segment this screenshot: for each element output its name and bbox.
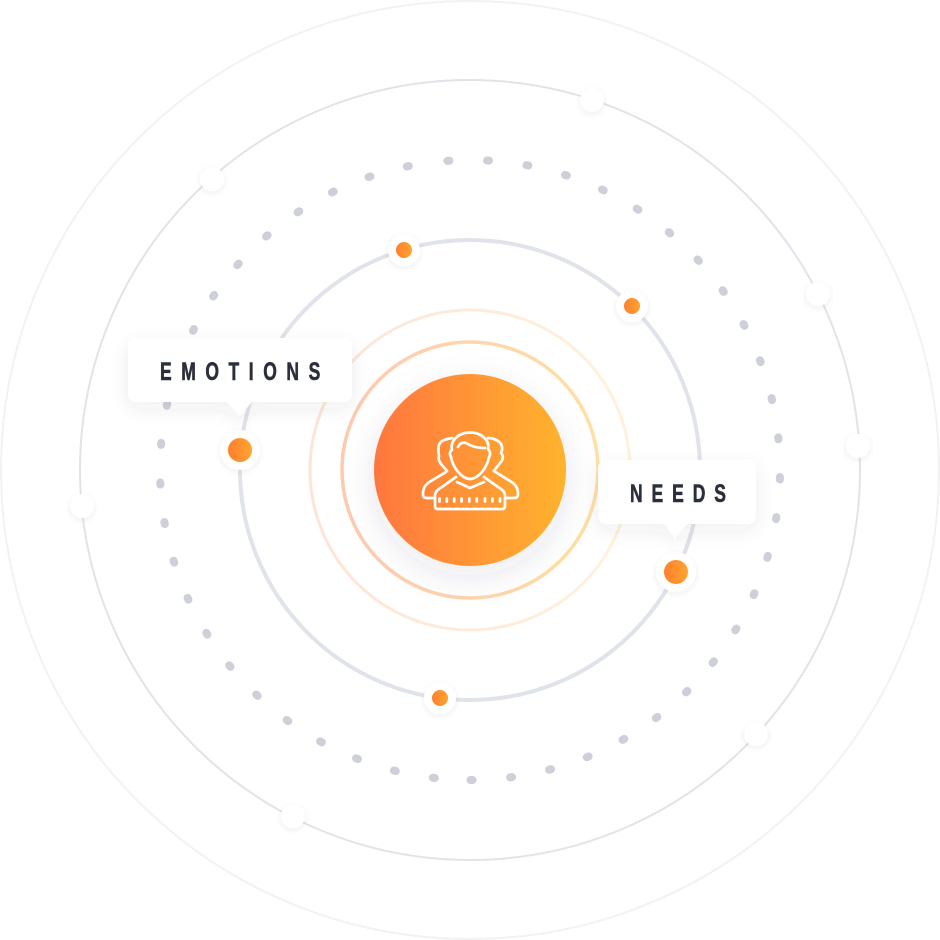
outer orbit nodes (70, 88, 870, 828)
small orange node bottom (424, 682, 456, 714)
callout: emotions (128, 338, 352, 416)
callout: needs: NEEDS (630, 479, 726, 508)
central circle (374, 374, 566, 566)
second orbit ring (80, 80, 860, 860)
pale orange halo ring (310, 310, 630, 630)
small orange node top left (388, 234, 420, 266)
small orange node top right (616, 290, 648, 322)
icon: group of people (423, 432, 518, 509)
callout: needs (598, 460, 756, 538)
needs node (656, 552, 696, 592)
emotions node (220, 430, 260, 470)
orange halo ring (342, 342, 598, 598)
inner orbit ring (240, 240, 700, 700)
callout: emotions: EMOTIONS (160, 357, 320, 386)
dotted orbit ring (153, 153, 787, 787)
